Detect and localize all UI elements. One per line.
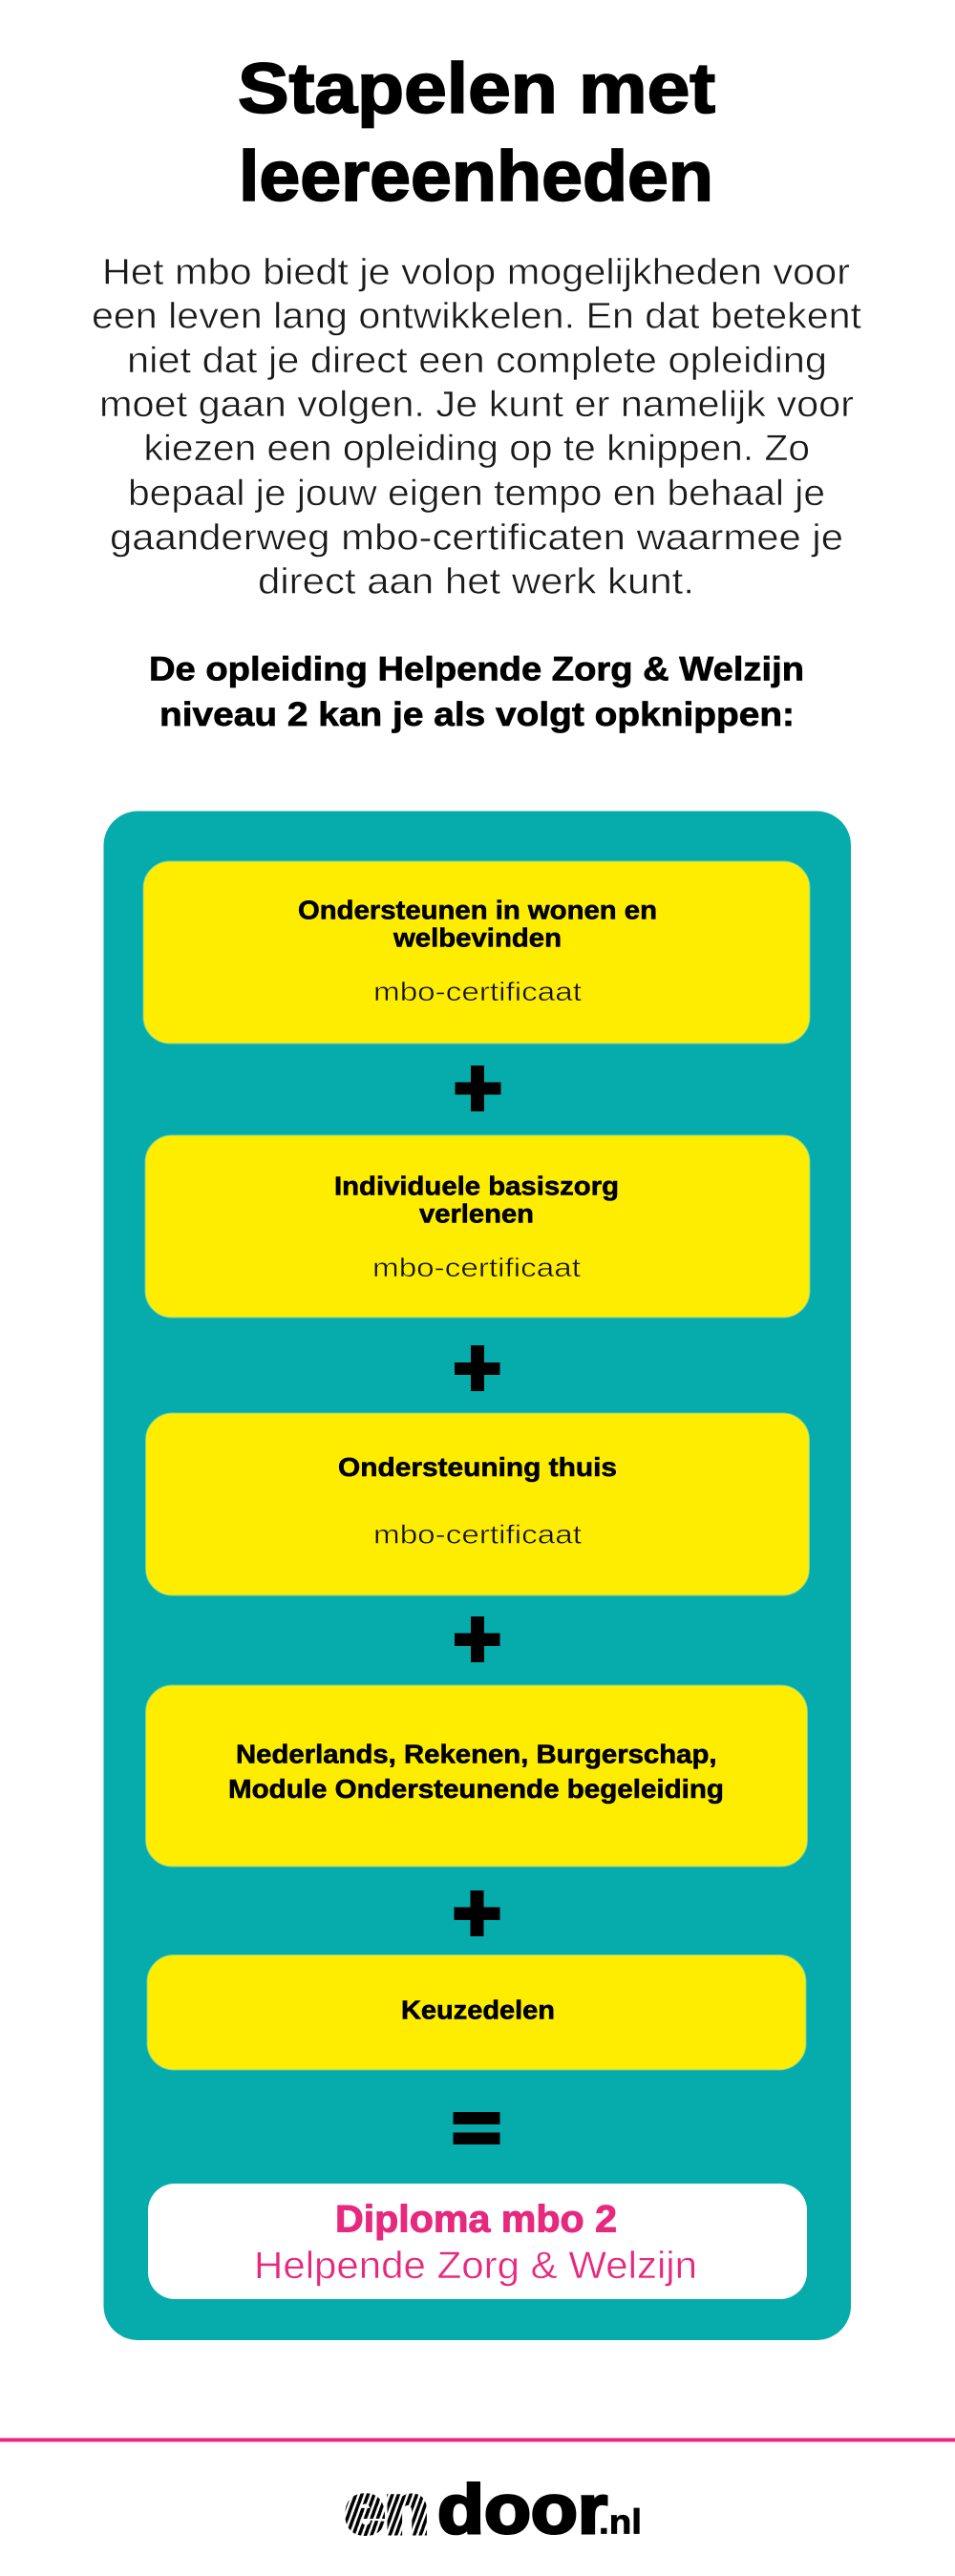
box: Ondersteuning thuis [145,1413,810,1595]
box: Individuele basiszorg verlenen [145,1135,810,1318]
logo: endoor.nl: en [345,2472,429,2548]
panel: teal stack [103,812,851,2340]
box: Nederlands, Rekenen, Burgerschap, Module Ondersteunende begeleiding [145,1685,808,1867]
logo: endoor.nl: door [437,2472,607,2548]
subheading [149,651,804,733]
subheading: De opleiding Helpende Zorg & Welzijn [149,651,804,687]
footer divider line [0,2439,955,2442]
subheading: niveau 2 kan je als volgt opknippen: [159,696,795,733]
intro text block [92,252,861,602]
logo: endoor.nl: .nl [599,2502,642,2542]
icon: plus [455,1345,500,1391]
box: Ondersteunen in wonen en welbevinden: welbevinden [393,922,562,953]
box: Ondersteuning thuis: mbo-certificaat [373,1520,582,1549]
box: Keuzedelen [147,1955,806,2070]
intro text block: moet gaan volgen. Je kunt er namelijk voor [99,385,854,425]
intro text block: bepaal je jouw eigen tempo en behaal je [128,474,825,514]
box: Diploma mbo 2 result: Diploma mbo 2 [335,2198,617,2240]
intro text block: Het mbo biedt je volop mogelijkheden voor [102,252,850,292]
intro text block: direct aan het werk kunt. [258,561,694,602]
box: Individuele basiszorg verlenen: verlenen [419,1199,534,1228]
box: Nederlands, Rekenen, Burgerschap, Module Ondersteunende begeleiding: Nederlands, Rekenen, Burgerschap, [236,1740,716,1768]
icon: equals [453,2112,500,2144]
box: Individuele basiszorg verlenen: Individuele basiszorg [334,1171,619,1201]
box: Keuzedelen: Keuzedelen [401,1995,555,2024]
box: Diploma mbo 2 result: Helpende Zorg & Welzijn [254,2245,697,2287]
icon: plus [455,1890,500,1936]
intro text block: gaanderweg mbo-certificaten waarmee je [110,517,843,558]
intro text block: niet dat je direct een complete opleiding [127,341,827,381]
title: Stapelen met [238,49,715,128]
logo: endoor.nl [345,2472,642,2548]
box: Diploma mbo 2 result [148,2184,807,2299]
title: leereenheden [239,137,713,216]
intro text block: een leven lang ontwikkelen. En dat betekent [92,296,861,336]
box: Ondersteuning thuis: Ondersteuning thuis [338,1452,617,1482]
icon: plus [455,1066,500,1111]
box: Ondersteunen in wonen en welbevinden [143,861,810,1044]
box: Nederlands, Rekenen, Burgerschap, Module Ondersteunende begeleiding: Module Ondersteunende begeleiding [228,1774,724,1804]
box: Ondersteunen in wonen en welbevinden: Ondersteunen in wonen en [298,896,657,924]
box: Individuele basiszorg verlenen: mbo-certificaat [372,1253,581,1282]
title [238,49,715,216]
icon: plus [455,1616,500,1662]
box: Ondersteunen in wonen en welbevinden: mbo-certificaat [373,977,582,1006]
intro text block: kiezen een opleiding op te knippen. Zo [143,429,810,469]
